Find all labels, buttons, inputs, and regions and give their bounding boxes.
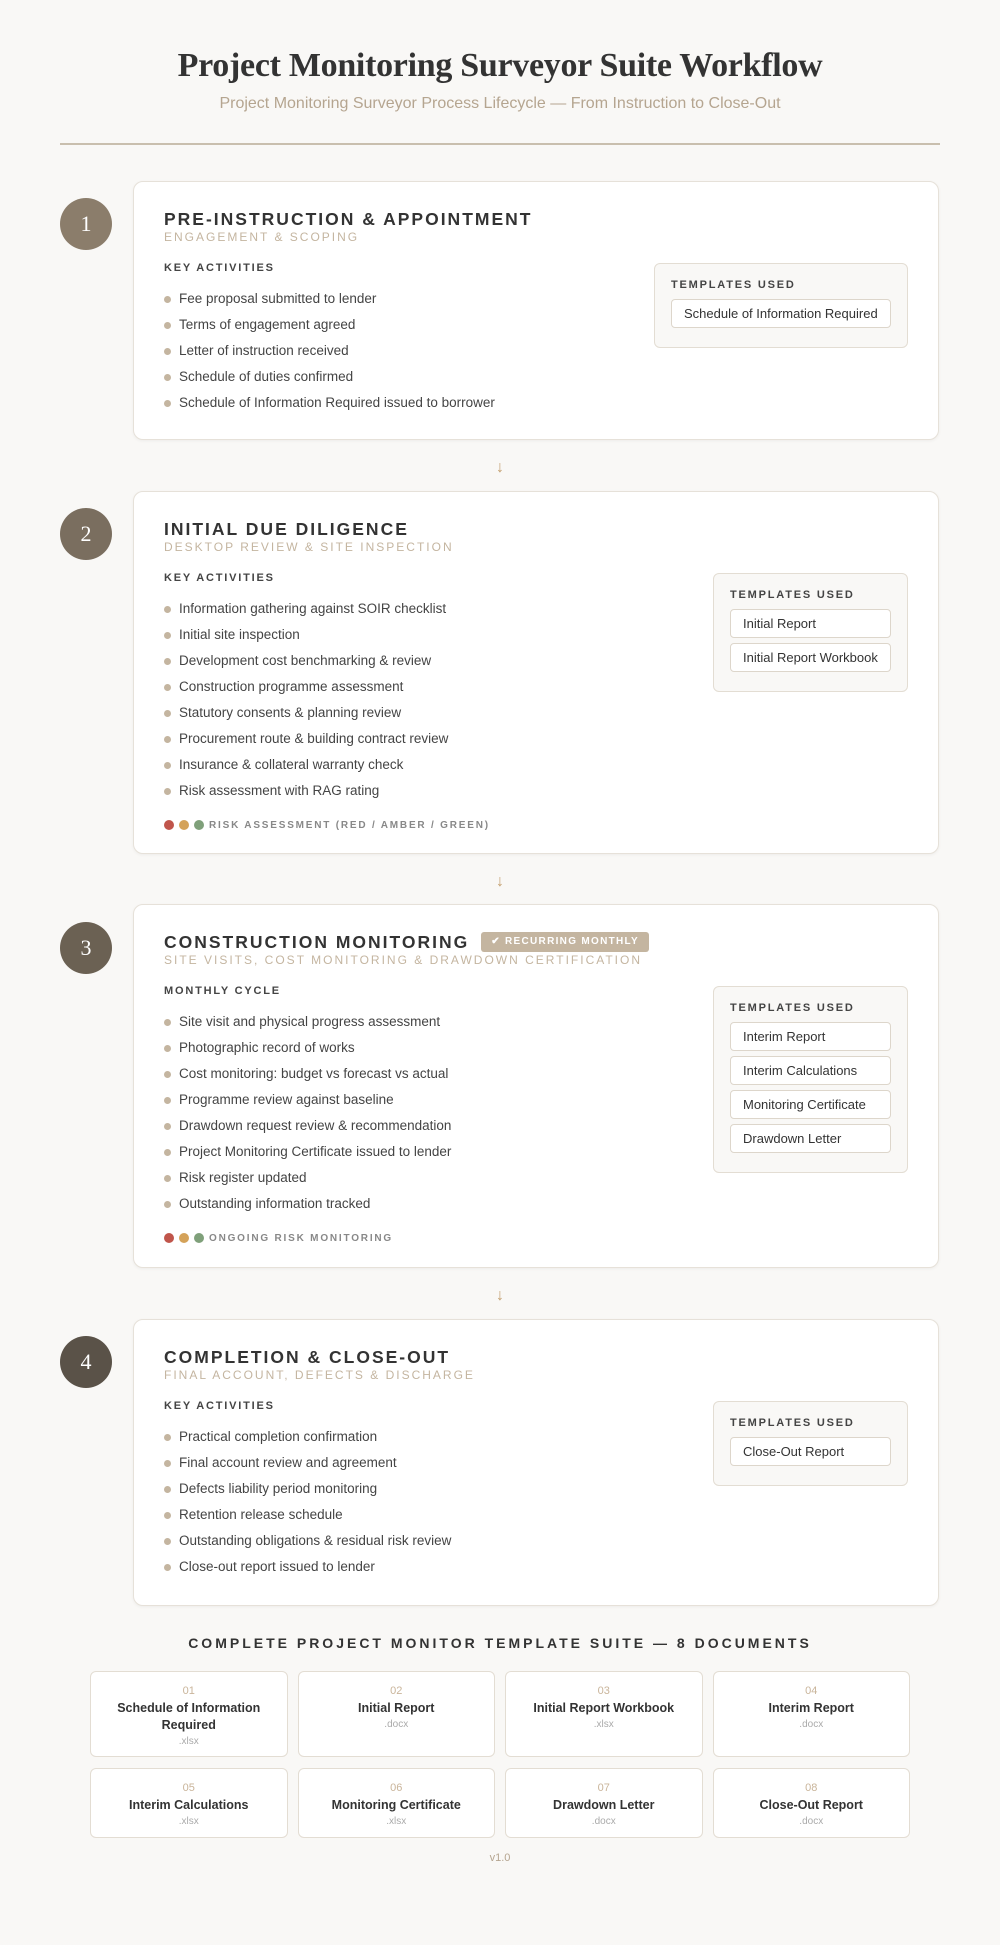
arrow: ↓ (496, 873, 504, 890)
templates box (713, 1401, 908, 1486)
heading: CONSTRUCTION MONITORING (164, 932, 469, 952)
heading: INITIAL DUE DILIGENCE (164, 519, 409, 539)
panel: stage 3: MONTHLY CYCLE (164, 985, 281, 997)
templates box: Drawdown Letter (743, 1131, 841, 1146)
activity list: Fee proposal submitted to lender (179, 291, 376, 306)
activity list: Close-out report issued to lender (179, 1559, 375, 1574)
activity list: Initial site inspection (179, 627, 300, 642)
heading (164, 932, 649, 952)
version: v1.0 (490, 1852, 510, 1864)
template suite grid: .xlsx (386, 1816, 406, 1827)
heading: PRE-INSTRUCTION & APPOINTMENT (164, 209, 532, 229)
activity list: Programme review against baseline (179, 1092, 394, 1107)
activity list (164, 1429, 452, 1574)
step circle 2 (60, 508, 112, 560)
panel: stage 1: ENGAGEMENT & SCOPING (164, 230, 359, 244)
RAG legend: ONGOING RISK MONITORING (209, 1232, 393, 1244)
template suite grid: 05 (183, 1782, 195, 1794)
activity list: Schedule of duties confirmed (179, 369, 353, 384)
panel: stage 4 (133, 1319, 939, 1606)
templates box: TEMPLATES USED (671, 279, 796, 291)
template suite grid: 07 (598, 1782, 610, 1794)
template suite grid: 02 (390, 1685, 402, 1697)
step circle 3 (60, 922, 112, 974)
template suite grid: 03 (598, 1685, 610, 1697)
step circle 1 (60, 198, 112, 250)
arrow: ↓ (496, 459, 504, 476)
template suite grid: .docx (384, 1719, 408, 1730)
template suite grid: .docx (592, 1816, 616, 1827)
template suite grid: Drawdown Letter (553, 1798, 654, 1812)
activity list: Practical completion confirmation (179, 1429, 377, 1444)
step circle 2: 2 (80, 521, 92, 546)
activity list: Cost monitoring: budget vs forecast vs actual (179, 1066, 448, 1081)
subtitle: Project Monitoring Surveyor Process Lifecycle — From Instruction to Close-Out (219, 95, 781, 112)
templates box: Schedule of Information Required (684, 306, 878, 321)
step circle 4: 4 (80, 1349, 92, 1374)
templates box: Initial Report Workbook (743, 650, 878, 665)
title: Project Monitoring Surveyor Suite Workflow (178, 47, 822, 84)
template suite grid: 08 (805, 1782, 817, 1794)
activity list: Site visit and physical progress assessment (179, 1014, 440, 1029)
panel: stage 1: KEY ACTIVITIES (164, 262, 275, 274)
activity list: Risk assessment with RAG rating (179, 783, 379, 798)
template suite grid: .xlsx (179, 1736, 199, 1747)
activity list: Outstanding obligations & residual risk review (179, 1533, 451, 1548)
template suite grid: .xlsx (179, 1816, 199, 1827)
activity list: Insurance & collateral warranty check (179, 757, 403, 772)
templates box: Close-Out Report (743, 1444, 844, 1459)
activity list: Information gathering against SOIR checklist (179, 601, 446, 616)
template suite grid: Initial Report Workbook (533, 1701, 674, 1715)
template suite grid (90, 1671, 910, 1838)
heading: COMPLETION & CLOSE-OUT (164, 1347, 450, 1367)
panel: stage 2 (133, 491, 939, 854)
panel: stage 3: SITE VISITS, COST MONITORING & DRAWDOWN CERTIFICATION (164, 953, 642, 967)
panel: stage 4: FINAL ACCOUNT, DEFECTS & DISCHARGE (164, 1368, 475, 1382)
activity list: Statutory consents & planning review (179, 705, 401, 720)
template suite grid: Close-Out Report (760, 1798, 863, 1812)
step circle 3: 3 (80, 935, 92, 960)
activity list (164, 1014, 452, 1211)
activity list: Schedule of Information Required issued to borrower (179, 395, 495, 410)
panel: stage 2: DESKTOP REVIEW & SITE INSPECTION (164, 540, 454, 554)
template suite grid: Schedule of Information (117, 1701, 260, 1715)
activity list: Construction programme assessment (179, 679, 403, 694)
activity list: Letter of instruction received (179, 343, 349, 358)
template suite grid: 04 (805, 1685, 817, 1697)
activity list: Development cost benchmarking & review (179, 653, 431, 668)
template suite grid: Monitoring Certificate (332, 1798, 461, 1812)
step circle 4 (60, 1336, 112, 1388)
activity list: Project Monitoring Certificate issued to lender (179, 1144, 451, 1159)
templates box (713, 986, 908, 1173)
template suite grid: Initial Report (358, 1701, 434, 1715)
template suite grid: Interim Calculations (129, 1798, 248, 1812)
panel: stage 4: KEY ACTIVITIES (164, 1400, 275, 1412)
arrow: ↓ (496, 1287, 504, 1304)
panel: stage 1 (133, 181, 939, 440)
template suite grid: 06 (390, 1782, 402, 1794)
activity list: Defects liability period monitoring (179, 1481, 377, 1496)
activity list: Final account review and agreement (179, 1455, 397, 1470)
activity list: Procurement route & building contract review (179, 731, 448, 746)
template suite grid: 01 (183, 1685, 195, 1697)
template suite grid: .docx (799, 1816, 823, 1827)
templates box: Interim Report (743, 1029, 825, 1044)
activity list (164, 601, 448, 798)
activity list: Drawdown request review & recommendation (179, 1118, 451, 1133)
template suite grid: Required (162, 1718, 216, 1732)
activity list: Outstanding information tracked (179, 1196, 370, 1211)
templates box: Monitoring Certificate (743, 1097, 866, 1112)
templates box: TEMPLATES USED (730, 1002, 855, 1014)
templates box (713, 573, 908, 692)
templates box: Interim Calculations (743, 1063, 857, 1078)
step circle 1: 1 (80, 211, 92, 236)
suite heading: COMPLETE PROJECT MONITOR TEMPLATE SUITE — 8 DOCUMENTS (188, 1635, 812, 1651)
template suite grid: .xlsx (594, 1719, 614, 1730)
template suite grid: .docx (799, 1719, 823, 1730)
templates box (654, 263, 908, 348)
templates box: TEMPLATES USED (730, 589, 855, 601)
activity list (164, 291, 495, 410)
panel: stage 3 (133, 904, 939, 1268)
templates box: Initial Report (743, 616, 816, 631)
templates box: TEMPLATES USED (730, 1417, 855, 1429)
panel: stage 2: KEY ACTIVITIES (164, 572, 275, 584)
activity list: Risk register updated (179, 1170, 307, 1185)
heading: ✔ RECURRING MONTHLY (491, 936, 639, 947)
activity list: Retention release schedule (179, 1507, 343, 1522)
activity list: Photographic record of works (179, 1040, 355, 1055)
RAG legend: RISK ASSESSMENT (RED / AMBER / GREEN) (209, 820, 490, 830)
template suite grid: Interim Report (769, 1701, 854, 1715)
activity list: Terms of engagement agreed (179, 317, 355, 332)
